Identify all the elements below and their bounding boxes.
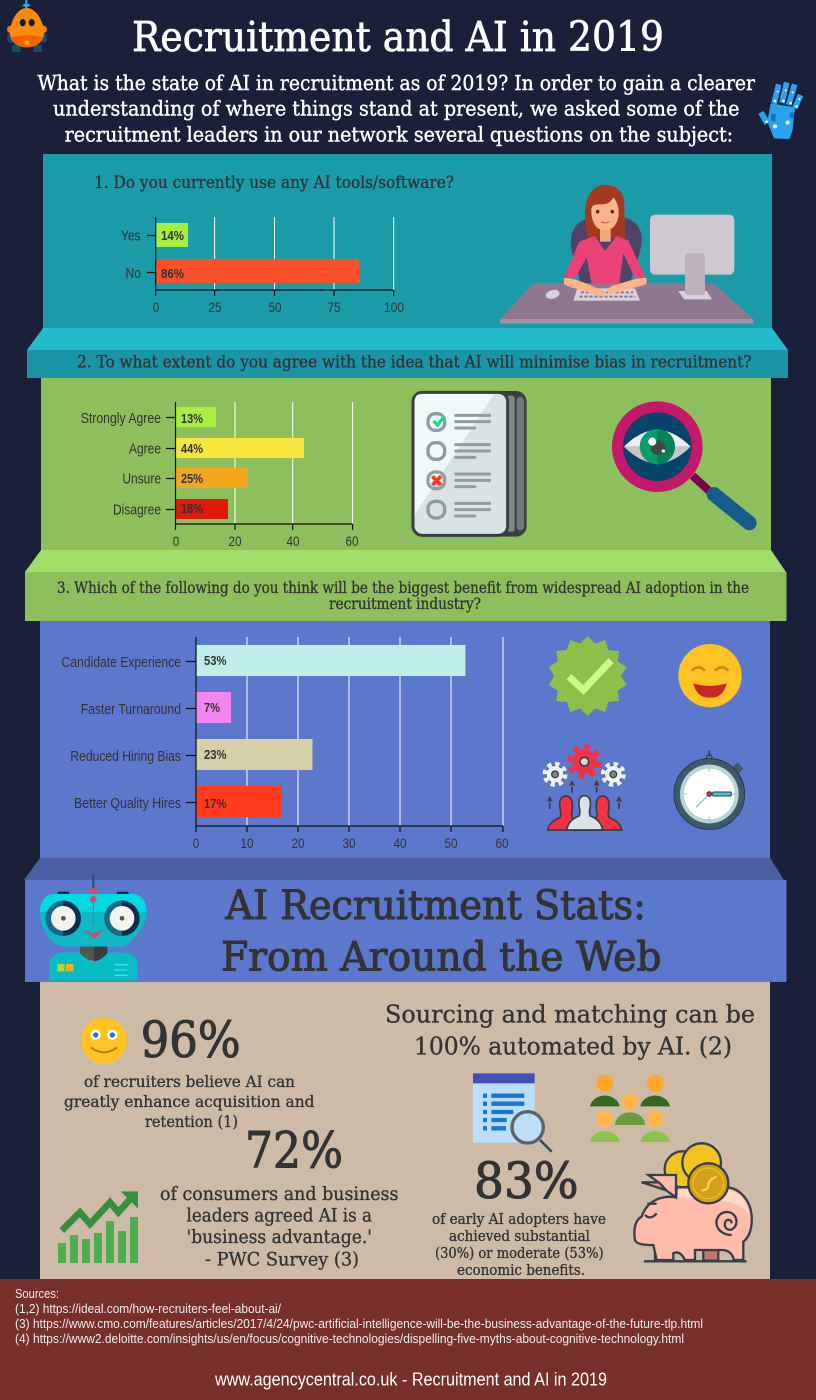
intro text: What is the state of AI in recruitment as of 2019? In order to gain a clearer bbox=[38, 71, 755, 95]
bar chart: AI tool use: 50 bbox=[268, 299, 282, 315]
bar chart: bias agreement: 40 bbox=[286, 533, 300, 549]
stat: 72 percent: - PWC Survey (3) bbox=[205, 1250, 359, 1271]
bar chart: biggest benefit bbox=[62, 637, 509, 851]
stat: 96 percent: 96% bbox=[141, 1011, 241, 1069]
bar chart: bias agreement: Strongly Agree bbox=[81, 411, 161, 427]
bar chart: AI tool use: Yes bbox=[121, 228, 140, 244]
bar chart: biggest benefit: 60 bbox=[496, 835, 509, 851]
heading: question 3: recruitment industry? bbox=[329, 594, 481, 613]
intro text: recruitment leaders in our network several questions on the subject: bbox=[65, 123, 733, 147]
icon: magnifier with eye bbox=[612, 401, 749, 523]
bar chart: AI tool use: 14% bbox=[161, 229, 184, 243]
heading: AI recruitment stats bbox=[221, 883, 662, 981]
bar chart: bias agreement: 25% bbox=[181, 472, 203, 486]
stat: 72 percent: 72% bbox=[245, 1122, 343, 1180]
bar chart: AI tool use: No bbox=[126, 266, 141, 282]
bar chart: biggest benefit: 7% bbox=[204, 701, 220, 715]
bar chart: biggest benefit: 40 bbox=[394, 835, 407, 851]
bar chart: bias agreement: Unsure bbox=[122, 472, 161, 488]
bar chart: biggest benefit: 50 bbox=[444, 835, 458, 851]
bar chart: biggest benefit: 23% bbox=[204, 748, 226, 762]
icon: teal robot bbox=[40, 874, 147, 981]
stat: sourcing and matching: 100% automated by AI. (2) bbox=[414, 1033, 732, 1061]
panel: question 1 bbox=[43, 154, 772, 328]
bar chart: biggest benefit: Better Quality Hires bbox=[74, 796, 181, 812]
illustration: woman at desk bbox=[500, 185, 753, 324]
panel: question 2 bbox=[41, 378, 771, 550]
stat: 96 percent: of recruiters believe AI can bbox=[84, 1072, 295, 1091]
heading: question 3 bbox=[57, 578, 749, 613]
sources: (1,2) https://ideal.com/how-recruiters-feel-about-ai/ bbox=[15, 1301, 281, 1316]
stat: 96 percent bbox=[64, 1011, 314, 1131]
panel: question 3 bbox=[40, 621, 770, 858]
bar chart: bias agreement: 44% bbox=[181, 442, 203, 456]
bar chart: bias agreement: 0 bbox=[173, 533, 179, 549]
bar chart: AI tool use: 75 bbox=[328, 299, 341, 315]
heading: AI recruitment stats: AI Recruitment Stats: bbox=[225, 883, 646, 929]
heading: AI recruitment stats: From Around the Web bbox=[221, 935, 662, 981]
bar chart: AI tool use: 0 bbox=[153, 299, 159, 315]
stat: 72 percent: of consumers and business bbox=[160, 1184, 398, 1205]
stat: 96 percent: greatly enhance acquisition and bbox=[64, 1092, 314, 1111]
bar chart: biggest benefit: 17% bbox=[204, 797, 226, 811]
icon: smiley bbox=[81, 1018, 127, 1064]
bar chart: biggest benefit: Reduced Hiring Bias bbox=[70, 749, 181, 765]
sources: (4) https://www2.deloitte.com/insights/us/en/focus/cognitive-technologies/dispelling-five-myths-about-cognitive-technology.html bbox=[15, 1331, 684, 1346]
bar chart: biggest benefit: 0 bbox=[193, 835, 199, 851]
bar chart: biggest benefit: 20 bbox=[292, 835, 305, 851]
bar chart: bias agreement: 60 bbox=[346, 533, 359, 549]
icon: laughing face bbox=[678, 644, 742, 707]
title: Recruitment and AI in 2019 bbox=[132, 13, 664, 61]
bar chart: bias agreement: 20 bbox=[228, 533, 242, 549]
header bbox=[7, 0, 801, 147]
icon: checklist bbox=[412, 391, 527, 537]
band: question 3 heading bbox=[25, 550, 786, 621]
bar chart: biggest benefit: 53% bbox=[204, 654, 226, 668]
sources bbox=[15, 1286, 703, 1346]
icon: robot hand bbox=[761, 82, 801, 139]
icon: piggy bank with coins bbox=[634, 1143, 752, 1261]
bar chart: bias agreement: Disagree bbox=[113, 502, 161, 518]
footer bbox=[0, 1279, 816, 1400]
footer credit: www.agencycentral.co.uk - Recruitment and AI in 2019 bbox=[214, 1370, 607, 1390]
stat: sourcing and matching bbox=[385, 1001, 755, 1152]
heading: question 2: 2. To what extent do you agree with the idea that AI will minimise bias in recruitment? bbox=[77, 353, 752, 372]
sources: Sources: bbox=[15, 1286, 59, 1301]
icon: people group bbox=[590, 1075, 670, 1142]
stat: 96 percent: retention (1) bbox=[145, 1112, 238, 1131]
stat: sourcing and matching: Sourcing and matching can be bbox=[385, 1001, 755, 1029]
stat: 83 percent: economic benefits. bbox=[457, 1263, 585, 1279]
bar chart: bias agreement: 13% bbox=[181, 412, 203, 426]
stat: 83 percent: 83% bbox=[474, 1152, 579, 1210]
stat: 83 percent bbox=[432, 1152, 606, 1279]
icon: orange robot bbox=[7, 0, 47, 52]
panel: web stats bbox=[40, 982, 770, 1279]
heading: question 1: 1. Do you currently use any AI tools/software? bbox=[94, 173, 454, 192]
stat: 83 percent: (30%) or moderate (53%) bbox=[435, 1246, 604, 1262]
bar chart: bias agreement bbox=[81, 402, 359, 549]
icon: growth chart bbox=[58, 1191, 138, 1263]
stat: 72 percent: leaders agreed AI is a bbox=[186, 1206, 372, 1227]
bar chart: bias agreement: Agree bbox=[129, 442, 161, 458]
stat: 72 percent bbox=[58, 1122, 398, 1271]
stat: 83 percent: achieved substantial bbox=[449, 1229, 590, 1245]
sources: (3) https://www.cmo.com/features/articles/2017/4/24/pwc-artificial-intelligence-will-be-the-business-advantage-of-the-future-tlp.html bbox=[15, 1316, 703, 1331]
bar chart: biggest benefit: 30 bbox=[342, 835, 356, 851]
band: question 2 heading bbox=[27, 328, 788, 378]
stat: 83 percent: of early AI adopters have bbox=[432, 1212, 606, 1228]
icon: stopwatch bbox=[674, 750, 745, 829]
intro text: understanding of where things stand at present, we asked some of the bbox=[53, 97, 740, 121]
icon: people and gears bbox=[545, 747, 624, 830]
bar chart: biggest benefit: 10 bbox=[240, 835, 254, 851]
bar chart: AI tool use: 25 bbox=[208, 299, 222, 315]
stat: 72 percent: 'business advantage.' bbox=[186, 1227, 372, 1248]
band: stats heading bbox=[24, 858, 786, 982]
intro text bbox=[38, 71, 755, 147]
icon: green check badge bbox=[549, 636, 627, 716]
icon: document search bbox=[473, 1073, 552, 1152]
bar chart: biggest benefit: Faster Turnaround bbox=[81, 702, 181, 718]
bar chart: AI tool use: 100 bbox=[384, 299, 404, 315]
bar chart: AI tool use bbox=[121, 217, 404, 315]
bar chart: biggest benefit: Candidate Experience bbox=[62, 655, 181, 671]
bar chart: bias agreement: 18% bbox=[181, 502, 203, 516]
bar chart: AI tool use: 86% bbox=[161, 267, 184, 281]
